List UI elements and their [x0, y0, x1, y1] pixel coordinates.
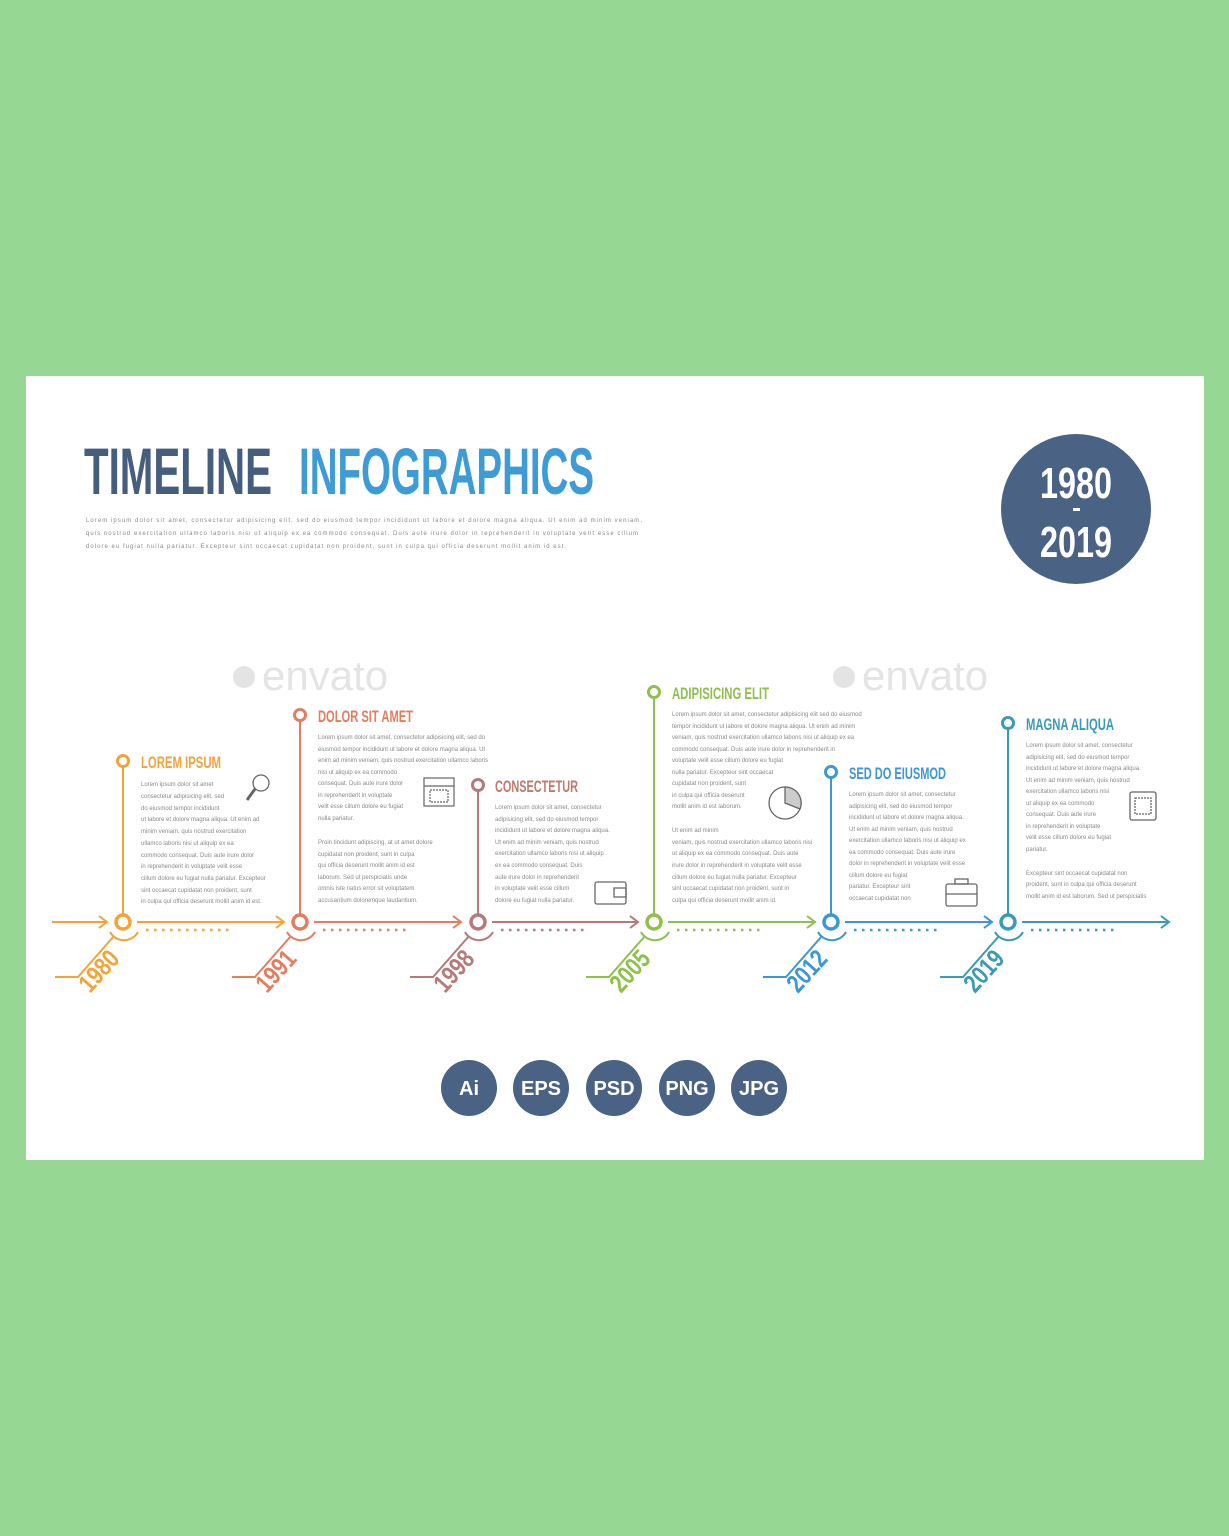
text block 6: Ut enim ad minim veniam, quis nostrud — [1026, 778, 1130, 784]
text block 4: in culpa qui officia deserunt — [672, 793, 745, 799]
text block 4: cillum dolore eu fugiat nulla pariatur. Excepteur — [672, 875, 797, 881]
text block 3: incididunt ut labore et dolore magna aliqua. — [495, 828, 610, 834]
timeline station: 1980 — [55, 756, 284, 998]
intro text block — [86, 518, 642, 550]
timeline station: 2005: 2005 — [603, 944, 656, 998]
text block 4: commodo consequat. Duis aute irure dolor in reprehenderit in — [672, 747, 835, 753]
format badges: PSD — [593, 1078, 635, 1100]
intro text block: dolore eu fugiat nulla pariatur. Excepteur sint occaecat cupidatat non proident, sunt in culpa qui officia deserunt mollit anim id est. — [86, 544, 566, 550]
icon: calendar — [424, 778, 454, 806]
title: INFOGRAPHICS — [299, 434, 594, 508]
format badges: JPG — [739, 1078, 779, 1100]
heading: consectetur: CONSECTETUR — [495, 777, 578, 796]
text block 2: Proin tincidunt adipiscing, at ut amet dolore — [318, 840, 433, 846]
text block 6: proident, sunt in culpa qui officia deserunt — [1026, 882, 1137, 888]
text block 2: accusantium doloremque laudantium. — [318, 898, 418, 904]
timeline station: 2019 — [940, 718, 1169, 998]
text block 3 — [495, 805, 610, 904]
heading: adipisicing elit: ADIPISICING ELIT — [672, 684, 769, 703]
text block 5: occaecat cupidatat non — [849, 896, 911, 902]
timeline station: 1980: 1980 — [72, 944, 125, 998]
text block 4: nulla pariatur. Excepteur sint occaecat — [672, 770, 774, 776]
text block 3: in voluptate velit esse cillum — [495, 886, 569, 892]
intro text block: quis nostrud exercitation ullamco laboris nisi ut aliquip ex ea commodo consequat. Duis aute irure dolor in reprehenderit in voluptate velit esse cillum — [86, 531, 638, 537]
panel: white card — [26, 376, 1204, 1160]
text block 2: consequat. Duis aute irure dolor — [318, 781, 403, 787]
watermark: envato: envato — [862, 652, 988, 699]
heading: lorem ipsum: LOREM IPSUM — [141, 753, 221, 772]
text block 3: ex ea commodo consequat. Duis — [495, 863, 582, 869]
text block 1: Lorem ipsum dolor sit amet — [141, 782, 214, 788]
format badges: Ai — [459, 1078, 479, 1100]
text block 6: consequat. Duis aute irure — [1026, 812, 1097, 818]
text block 2: Lorem ipsum dolor sit amet, consectetur adipisicing elit, sed do — [318, 735, 486, 741]
text block 4: tempor incididunt ut labore et dolore magna aliqua. Ut enim ad minim — [672, 724, 855, 730]
format badges: EPS — [521, 1078, 561, 1100]
text block 1: do eiusmod tempor incididunt — [141, 806, 220, 812]
timeline station: 2012 — [763, 766, 992, 998]
text block 1: ut labore et dolore magna aliqua. Ut enim ad — [141, 817, 259, 823]
text block 4: Ut enim ad minim — [672, 828, 719, 834]
text block 2: laborum. Sed ut perspiciatis unde — [318, 875, 408, 881]
text block 1 — [141, 782, 266, 905]
icon: calculator — [1130, 792, 1156, 820]
text block 3: dolore eu fugiat nulla pariatur. — [495, 898, 574, 904]
date badge 1980-2019: 1980 — [1040, 459, 1112, 508]
text block 4: voluptate velit esse cillum dolore eu fugiat — [672, 758, 783, 764]
timeline station: 1998: 1998 — [427, 944, 480, 998]
timeline station: 1998 — [410, 780, 638, 998]
text block 5: pariatur. Excepteur sint — [849, 884, 911, 890]
text block 4: ut aliquip ex ea commodo consequat. Duis aute — [672, 851, 799, 857]
text block 5: Ut enim ad minim veniam, quis nostrud — [849, 827, 953, 833]
text block 2: in reprehenderit in voluptate — [318, 793, 393, 799]
text block 1: cillum dolore eu fugiat nulla pariatur. Excepteur — [141, 876, 266, 882]
text block 1: consectetur adipisicing elit, sed — [141, 794, 224, 800]
text block 4: Lorem ipsum dolor sit amet, consectetur adipisicing elit sed do eiusmod — [672, 712, 862, 718]
text block 1: ullamco laboris nisi ut aliquip ex ea — [141, 841, 234, 847]
text block 5: exercitation ullamco laboris nisi ut aliquip ex — [849, 838, 966, 844]
text block 6: velit esse cillum dolore eu fugiat — [1026, 835, 1111, 841]
text block 2: omnis iste natus error sit voluptatem — [318, 886, 414, 892]
text block 1: minim veniam, quis nostrud exercitation — [141, 829, 246, 835]
text block 5: adipisicing elit, sed do eiusmod tempor — [849, 804, 952, 810]
heading: dolor sit amet: DOLOR SIT AMET — [318, 707, 413, 726]
text block 2: qui officia deserunt mollit anim id est — [318, 863, 415, 869]
text block 4 — [672, 712, 862, 904]
text block 6: mollit anim id est laborum. Sed ut perspiciatis — [1026, 894, 1146, 900]
timeline station: 2005 — [586, 686, 815, 998]
timeline station: 1991 — [232, 710, 461, 998]
text block 6: Lorem ipsum dolor sit amet, consectetur — [1026, 743, 1133, 749]
text block 3: adipisicing elit, sed do eiusmod tempor — [495, 817, 598, 823]
text block 4: cupidatat non proident, sunt — [672, 781, 746, 787]
timeline station: 2019: 2019 — [957, 944, 1010, 998]
text block 5: dolor in reprehenderit in voluptate velit esse — [849, 861, 966, 867]
text block 3: Ut enim ad minim veniam, quis nostrud — [495, 840, 599, 846]
text block 3: exercitation ullamco laboris nisi ut aliquip — [495, 851, 604, 857]
text block 2: velit esse cillum dolore eu fugiat — [318, 804, 403, 810]
text block 1: in reprehenderit in voluptate velit esse — [141, 864, 243, 870]
text block 3: Lorem ipsum dolor sit amet, consectetur — [495, 805, 602, 811]
text block 2 — [318, 735, 488, 904]
text block 4: veniam, quis nostrud exercitation ullamco laboris nisi ut aliquip ex ea — [672, 735, 855, 741]
text block 2: nisi ut aliquip ex ea commodo — [318, 770, 398, 776]
icon: wallet — [595, 882, 626, 904]
watermark: envato — [233, 652, 988, 699]
heading: magna aliqua: MAGNA ALIQUA — [1026, 715, 1114, 734]
text block 5: Lorem ipsum dolor sit amet, consectetur — [849, 792, 956, 798]
title — [84, 434, 594, 508]
text block 4: mollit anim id est laborum. — [672, 804, 742, 810]
format badges: PNG — [665, 1078, 709, 1100]
text block 2: cupidatat non proident, sunt in culpa — [318, 852, 415, 858]
timeline station: 1991: 1991 — [249, 944, 302, 998]
entry arrow — [52, 916, 107, 928]
intro text block: Lorem ipsum dolor sit amet, consectetur adipisicing elit, sed do eiusmod tempor incididunt ut labore et dolore magna aliqua. Ut enim ad minim veniam, — [86, 518, 642, 524]
icon: pie chart — [769, 787, 801, 819]
text block 5: incididunt ut labore et dolore magna aliqua. — [849, 815, 964, 821]
text block 6: Excepteur sint occaecat cupidatat non — [1026, 871, 1127, 877]
text block 4: veniam, quis nostrud exercitation ullamco laboris nisi — [672, 840, 812, 846]
text block 4: irure dolor in reprehenderit in voluptate velit esse — [672, 863, 802, 869]
text block 3: aute irure dolor in reprehenderit — [495, 875, 579, 881]
icon: briefcase — [946, 879, 977, 906]
text block 4: sint occaecat cupidatat non proident, sunt in — [672, 886, 789, 892]
text block 6: ut aliquip ex ea commodo — [1026, 801, 1095, 807]
text block 4: culpa qui officia deserunt mollit anim id. — [672, 898, 777, 904]
text block 5: cillum dolore eu fugiat — [849, 873, 908, 879]
text block 6: incididunt ut labore et dolore magna aliqua. — [1026, 766, 1141, 772]
text block 6: pariatur. — [1026, 847, 1048, 853]
text block 6 — [1026, 743, 1146, 900]
text block 5 — [849, 792, 966, 902]
text block 2: eiusmod tempor incididunt ut labore et dolore magna aliqua. Ut — [318, 747, 485, 753]
text block 1: in culpa qui officia deserunt mollit anim id est. — [141, 899, 262, 905]
heading: sed do eiusmod: SED DO EIUSMOD — [849, 764, 946, 783]
date badge 1980-2019: 2019 — [1040, 518, 1112, 567]
text block 2: enim ad minim veniam, quis nostrud exercitation ullamco laboris — [318, 758, 488, 764]
text block 6: exercitation ullamco laboris nisi — [1026, 789, 1109, 795]
text block 6: in reprehenderit in voluptate — [1026, 824, 1101, 830]
text block 1: sint occaecat cupidatat non proident, sunt — [141, 888, 252, 894]
text block 6: adipisicing elit, sed do eiusmod tempor — [1026, 755, 1129, 761]
icon: magnifier — [247, 775, 269, 800]
title: TIMELINE — [84, 434, 272, 508]
text block 5: ea commodo consequat. Duis aute irure — [849, 850, 956, 856]
watermark: envato: envato — [262, 652, 388, 699]
text block 2: nulla pariatur. — [318, 816, 354, 822]
timeline station: 2012: 2012 — [780, 944, 833, 998]
format badges — [441, 1060, 787, 1116]
text block 1: commodo consequat. Duis aute irure dolor — [141, 853, 254, 859]
date badge 1980-2019 — [1001, 434, 1151, 584]
